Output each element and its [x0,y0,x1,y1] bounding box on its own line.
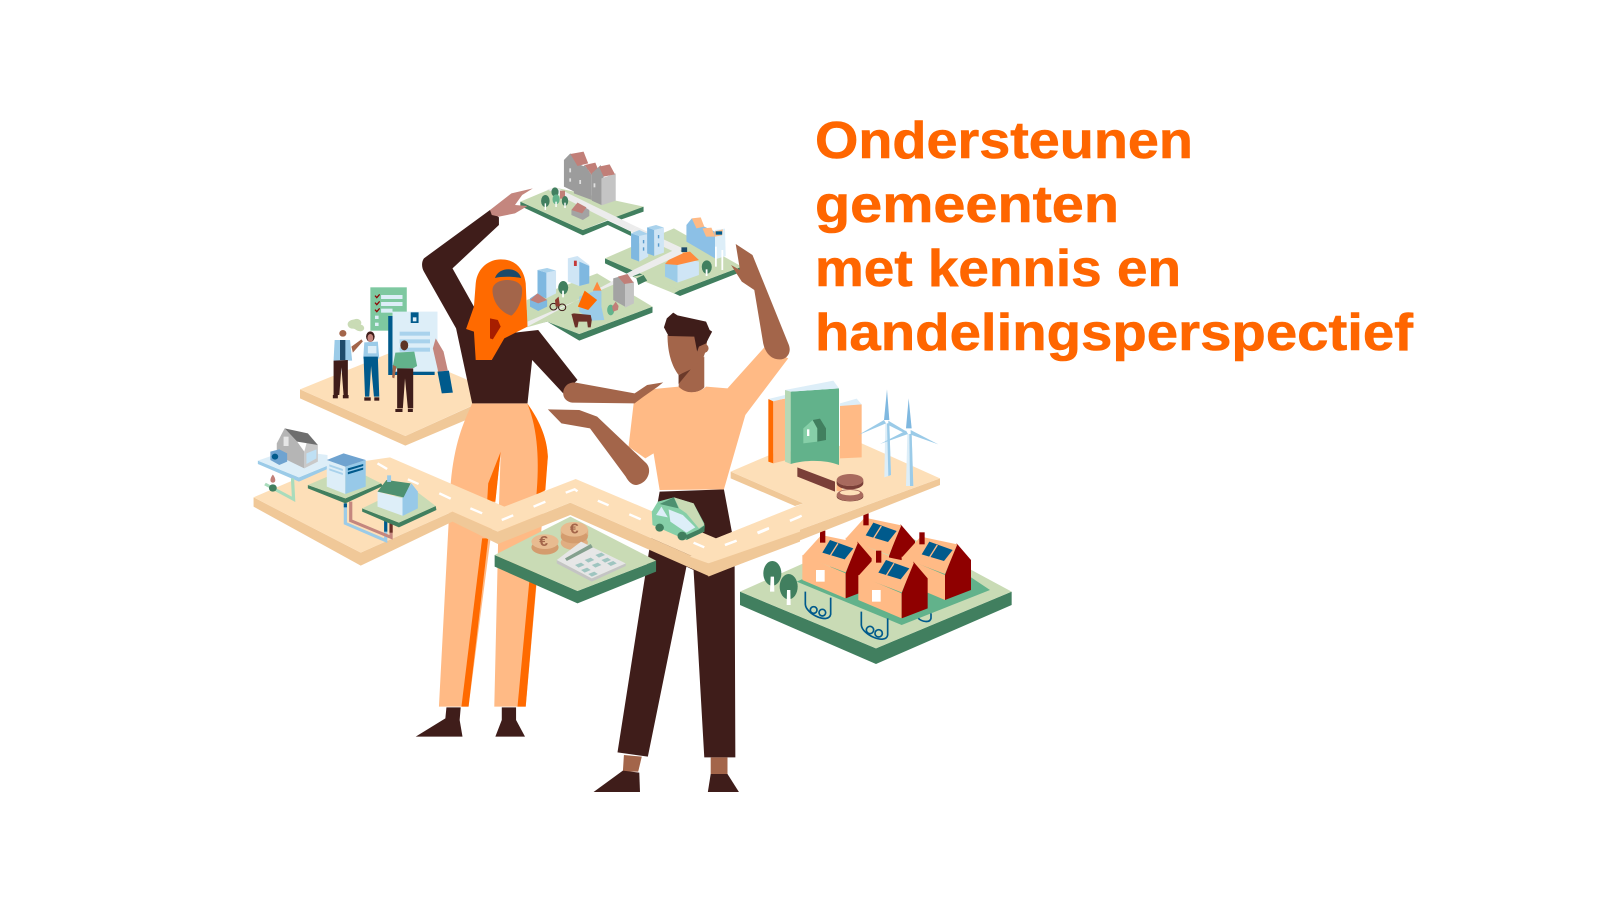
road side faces [254,472,940,577]
man neck [679,357,704,392]
document: green checklist [370,287,407,331]
road: connecting platform with dashed lane [254,443,940,577]
panel: policy platform with people [300,287,476,446]
icon: connected house [362,475,436,527]
house: front [858,551,928,618]
icon: euro coins: € [570,521,579,537]
platform: town with flats [605,217,742,296]
person: man in green shirt [392,340,417,412]
document: permit form held by hand [388,312,453,393]
man head [664,313,712,384]
icon: wind turbines [858,389,938,486]
icon: calculator [557,542,626,582]
platform: green base [740,533,1012,664]
man torso [629,347,788,490]
panel: village platforms [520,152,742,341]
panel: neighbourhood with solar houses [740,513,1012,664]
icon: heat network pipes [345,502,391,541]
icon: books [768,381,862,465]
icon: euro coins: € [539,533,549,550]
platform: top village [520,152,644,236]
panel: finance platform [495,517,656,603]
icon: heat pump house [258,428,327,482]
figure: man legs and shoes [594,489,739,792]
title: handelingsperspectief [815,304,1414,362]
house: back [846,513,915,581]
icon: trees [763,561,798,605]
title: Ondersteunen [815,112,1193,170]
man left arm [548,409,649,485]
platform: village with church [527,248,683,341]
title: met kennis en [815,240,1181,298]
icon: district heat building [308,453,383,503]
woman torso and raised arm [422,210,577,403]
road dashes [377,463,802,547]
platform: green base [495,517,656,603]
title [815,112,1414,362]
icon: euro coins [531,521,588,555]
panel: books, gavel and wind turbines [768,381,938,501]
panel: heat options platform [258,428,436,541]
house: left [802,531,872,598]
title: gemeenten [815,176,1119,234]
figure: woman legs and shoes [416,403,548,737]
woman raised hand [490,188,533,217]
man raised arm [731,244,790,359]
woman headscarf and face [466,259,527,360]
house: right [902,532,971,600]
woman forearm and hand on shoulder [563,382,663,403]
figure: man upper body [548,244,790,490]
icon: gavel [797,467,863,501]
figure: woman upper body [422,188,663,403]
icon: green electric car [652,497,705,540]
person: woman in jeans [363,331,379,401]
icon: gas pipe and flame [265,475,294,499]
icon: ground coils [805,592,931,639]
person: man in blue shirt [333,319,364,398]
platform: peach base [300,350,476,446]
road top faces [254,443,940,563]
